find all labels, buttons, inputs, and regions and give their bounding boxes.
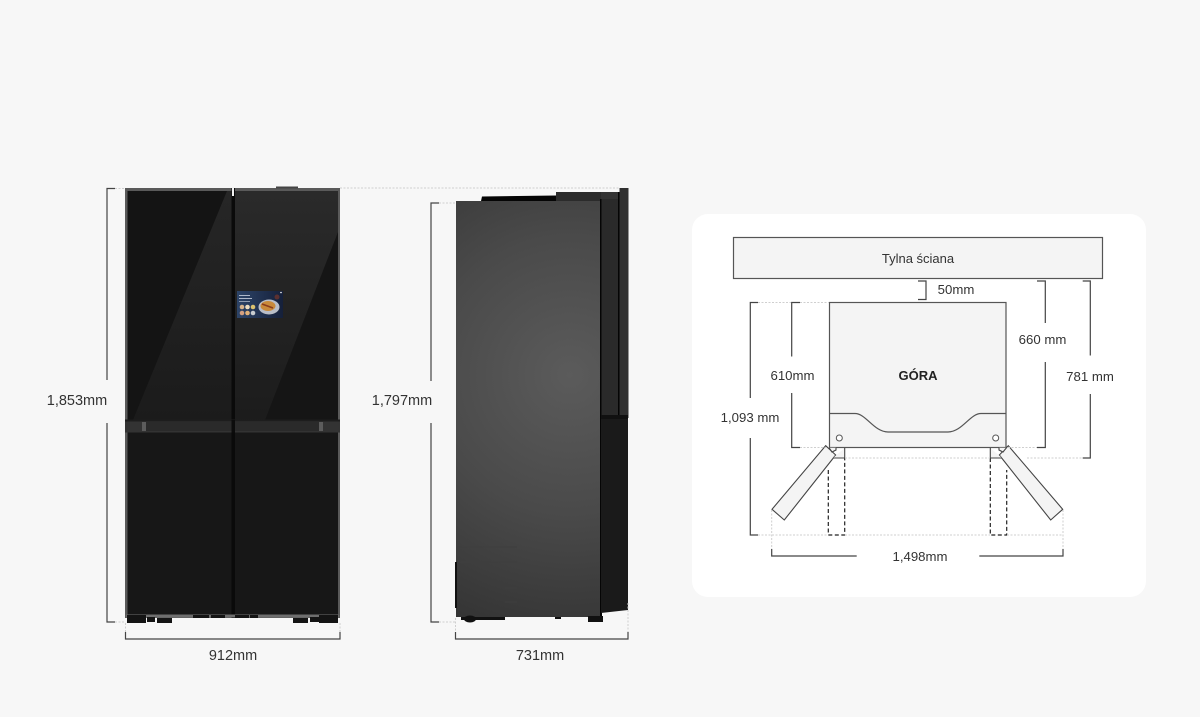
base strip [126, 614, 339, 618]
hinge highlight [232, 187, 234, 196]
right door dashed swing [990, 458, 1007, 535]
bottom right door [235, 432, 338, 614]
feet [127, 615, 338, 623]
dimension: 610mm [771, 302, 826, 448]
top hinge covers [481, 192, 619, 201]
upper door [602, 199, 618, 415]
top left door [128, 191, 232, 420]
side view refrigerator [455, 188, 628, 622]
panel: installation clearance diagram [692, 214, 1146, 597]
label 50mm: 50mm [938, 282, 974, 297]
dimension: 1,093 mm [721, 302, 1062, 535]
dimension: 1,498mm [772, 510, 1063, 564]
dimension: width 912mm [126, 623, 340, 664]
door centre gap [232, 188, 235, 618]
label 1,797mm: 1,797mm [372, 393, 432, 409]
door seal [600, 199, 602, 617]
dimension: depth 731mm [456, 603, 628, 664]
lower door [601, 419, 628, 613]
upper door handle [618, 188, 628, 418]
label 1,093 mm: 1,093 mm [721, 410, 779, 425]
front view refrigerator [125, 186, 340, 623]
dimension: height 1,797mm [372, 203, 456, 622]
label 781 mm: 781 mm [1066, 369, 1114, 384]
middle hinge [601, 415, 628, 419]
refrigerator top view [830, 302, 1006, 448]
dimension: height 1,853mm [47, 188, 125, 622]
dimension: gap 50mm [918, 281, 974, 300]
feet [461, 616, 603, 622]
lower compartment outline [458, 547, 517, 602]
dimension: 660 mm [1008, 281, 1066, 448]
cabinet body [456, 201, 601, 617]
panel background [692, 214, 1146, 597]
front body frame [125, 188, 340, 618]
middle handle band [125, 420, 340, 432]
left open door [772, 446, 845, 535]
rear bulge [455, 562, 457, 608]
left door dashed swing [828, 458, 845, 535]
back wall label: Tylna ściana [882, 251, 955, 266]
top cover [276, 186, 298, 188]
left hinge [829, 448, 845, 458]
label 1,498mm: 1,498mm [893, 549, 947, 564]
right hinge [990, 448, 1006, 458]
smart display screen [237, 291, 283, 318]
dimension: 781 mm [845, 281, 1114, 458]
top alignment guide [340, 187, 620, 189]
right open door [990, 446, 1063, 535]
back wall [734, 238, 1102, 278]
bottom left door [128, 432, 232, 614]
label 610mm: 610mm [771, 368, 814, 383]
top right door [235, 191, 338, 420]
label GÓRA: GÓRA [898, 368, 938, 383]
label 912mm: 912mm [209, 648, 257, 664]
label 731mm: 731mm [516, 648, 564, 664]
door line curve [830, 414, 1006, 432]
hinge circles [836, 435, 999, 441]
label 660 mm: 660 mm [1019, 332, 1066, 347]
label 1,853mm: 1,853mm [47, 393, 107, 409]
